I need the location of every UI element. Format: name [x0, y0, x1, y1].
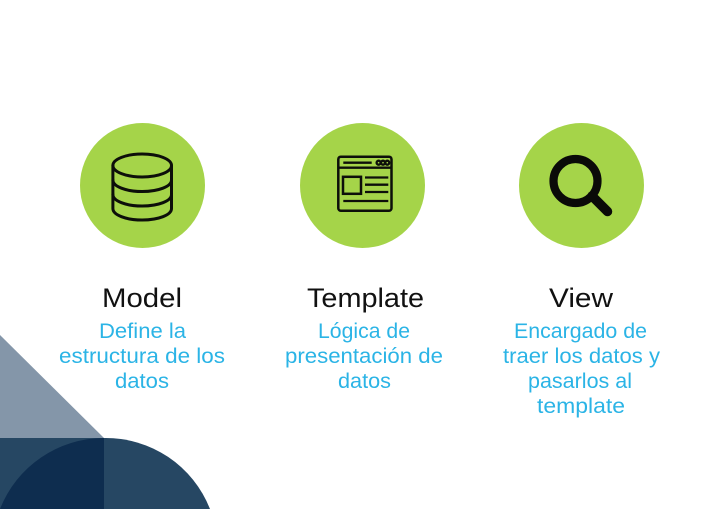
text: view description: traer los datos y	[503, 345, 661, 368]
heading: Template: Template	[307, 283, 424, 313]
text: view description	[503, 320, 661, 418]
panel: template	[285, 123, 443, 393]
text: view description: pasarlos al	[528, 370, 632, 393]
text: template description: datos	[338, 370, 391, 393]
text: view description: template	[537, 395, 625, 418]
text: template description: presentación de	[285, 345, 443, 368]
icon: web page layout	[300, 123, 425, 248]
heading: View: View	[549, 283, 614, 313]
icon: database	[80, 123, 205, 248]
text: view description: Encargado de	[514, 320, 647, 343]
icon: magnifying glass	[519, 123, 644, 248]
text: template description: Lógica de	[318, 320, 410, 343]
heading: Model: Model	[102, 283, 182, 313]
text: template description	[285, 320, 443, 393]
text: model description: estructura de los	[59, 345, 225, 368]
text: model description: datos	[115, 370, 169, 393]
text: model description: Define la	[99, 320, 186, 343]
panel: view	[503, 123, 661, 418]
text: model description	[59, 320, 225, 393]
decorative corner shapes	[0, 335, 210, 509]
panel: model	[59, 123, 225, 393]
